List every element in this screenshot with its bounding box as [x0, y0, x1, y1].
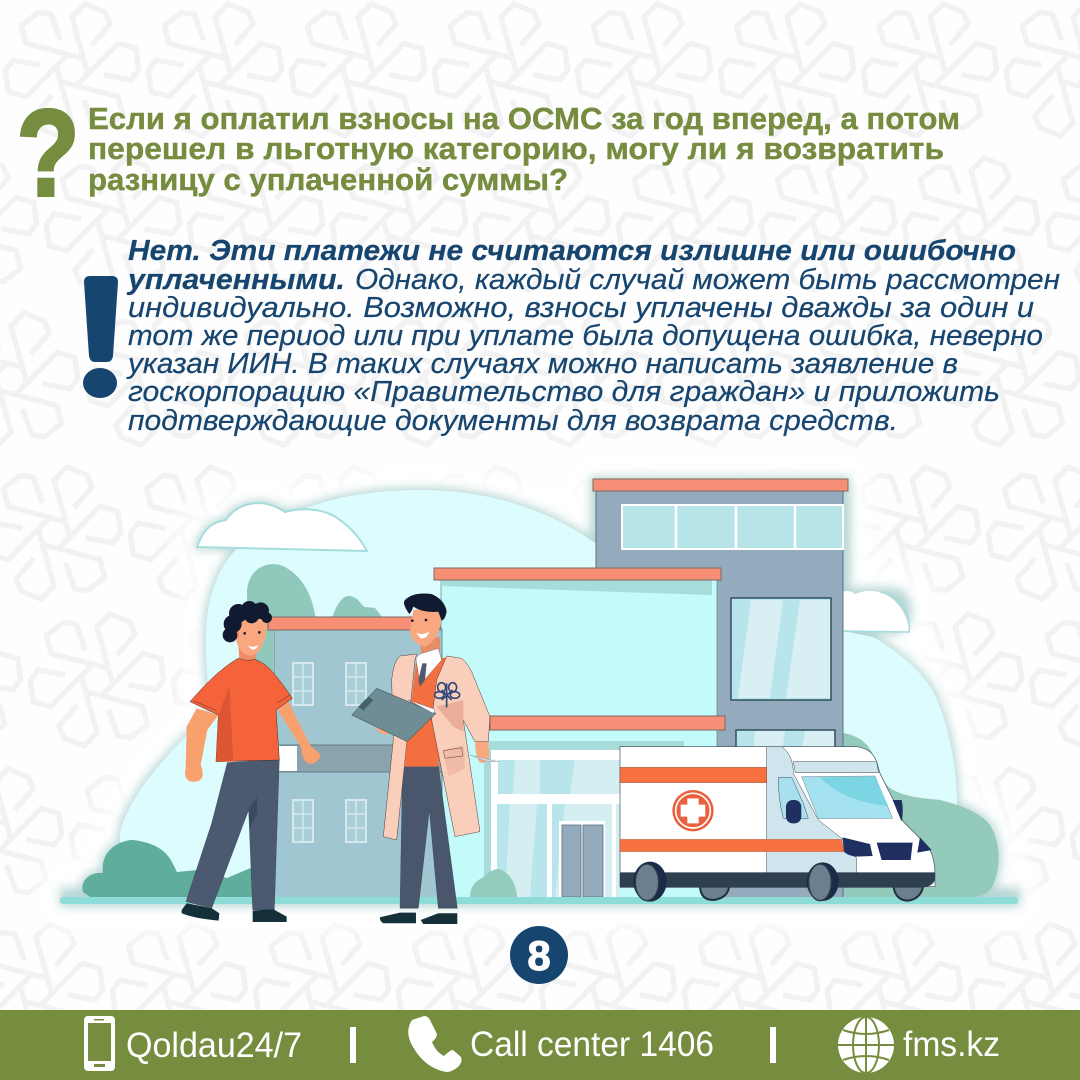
- illustration: [60, 479, 1018, 924]
- question heading: Если я оплатил взносы на ОСМС за год вперед, а потом: [88, 101, 960, 136]
- man in orange shirt: [182, 601, 320, 922]
- question heading: перешел в льготную категорию, могу ли я возвратить: [88, 131, 944, 166]
- background blob: [120, 490, 965, 897]
- icon: smartphone: [84, 1016, 115, 1071]
- left building: [268, 617, 450, 898]
- ground: [60, 897, 1018, 904]
- question mark: ?: [16, 85, 80, 223]
- trees: [247, 564, 317, 690]
- answer text: [126, 235, 1060, 437]
- ambulance: [620, 747, 935, 902]
- icon: globe: [838, 1017, 894, 1073]
- divider: [350, 1027, 356, 1063]
- exclamation mark icon: [83, 276, 118, 398]
- answer text: Нет. Эти платежи не считаются излишне или ошибочно: [128, 235, 1016, 267]
- answer text: Однако, каждый случай может быть рассмотрен: [355, 264, 1060, 296]
- answer text: уплаченными.: [126, 264, 345, 296]
- page number badge: [510, 926, 568, 984]
- contact: Qoldau: Qoldau24/7: [126, 1026, 302, 1065]
- cloud left: [197, 503, 367, 551]
- glow: [62, 479, 1018, 904]
- answer text: госкорпорацию «Правительство для граждан» и приложить: [128, 376, 1000, 408]
- answer text: индивидуально. Возможно, взносы уплачены дважды за один и: [128, 292, 1034, 324]
- answer text: подтверждающие документы для возврата средств.: [128, 405, 898, 437]
- divider: [770, 1027, 776, 1063]
- coat logo: [435, 683, 460, 707]
- answer text: указан ИИН. В таких случаях можно написать заявление в: [126, 348, 958, 380]
- cloud right: [840, 591, 909, 632]
- contact: call center: Call center 1406: [470, 1025, 714, 1064]
- tower building: [593, 479, 848, 900]
- question heading: [88, 101, 960, 197]
- question heading: разницу с уплаченной суммы?: [88, 162, 568, 197]
- doctor: [352, 593, 498, 924]
- answer text: тот же период или при уплате была допущена ошибка, неверно: [128, 320, 1043, 352]
- page number badge: 8: [527, 932, 551, 979]
- middle building: [434, 568, 725, 899]
- footer bar: [0, 1010, 1080, 1080]
- contact: website: fms.kz: [903, 1025, 1000, 1064]
- icon: phone handset: [408, 1016, 462, 1072]
